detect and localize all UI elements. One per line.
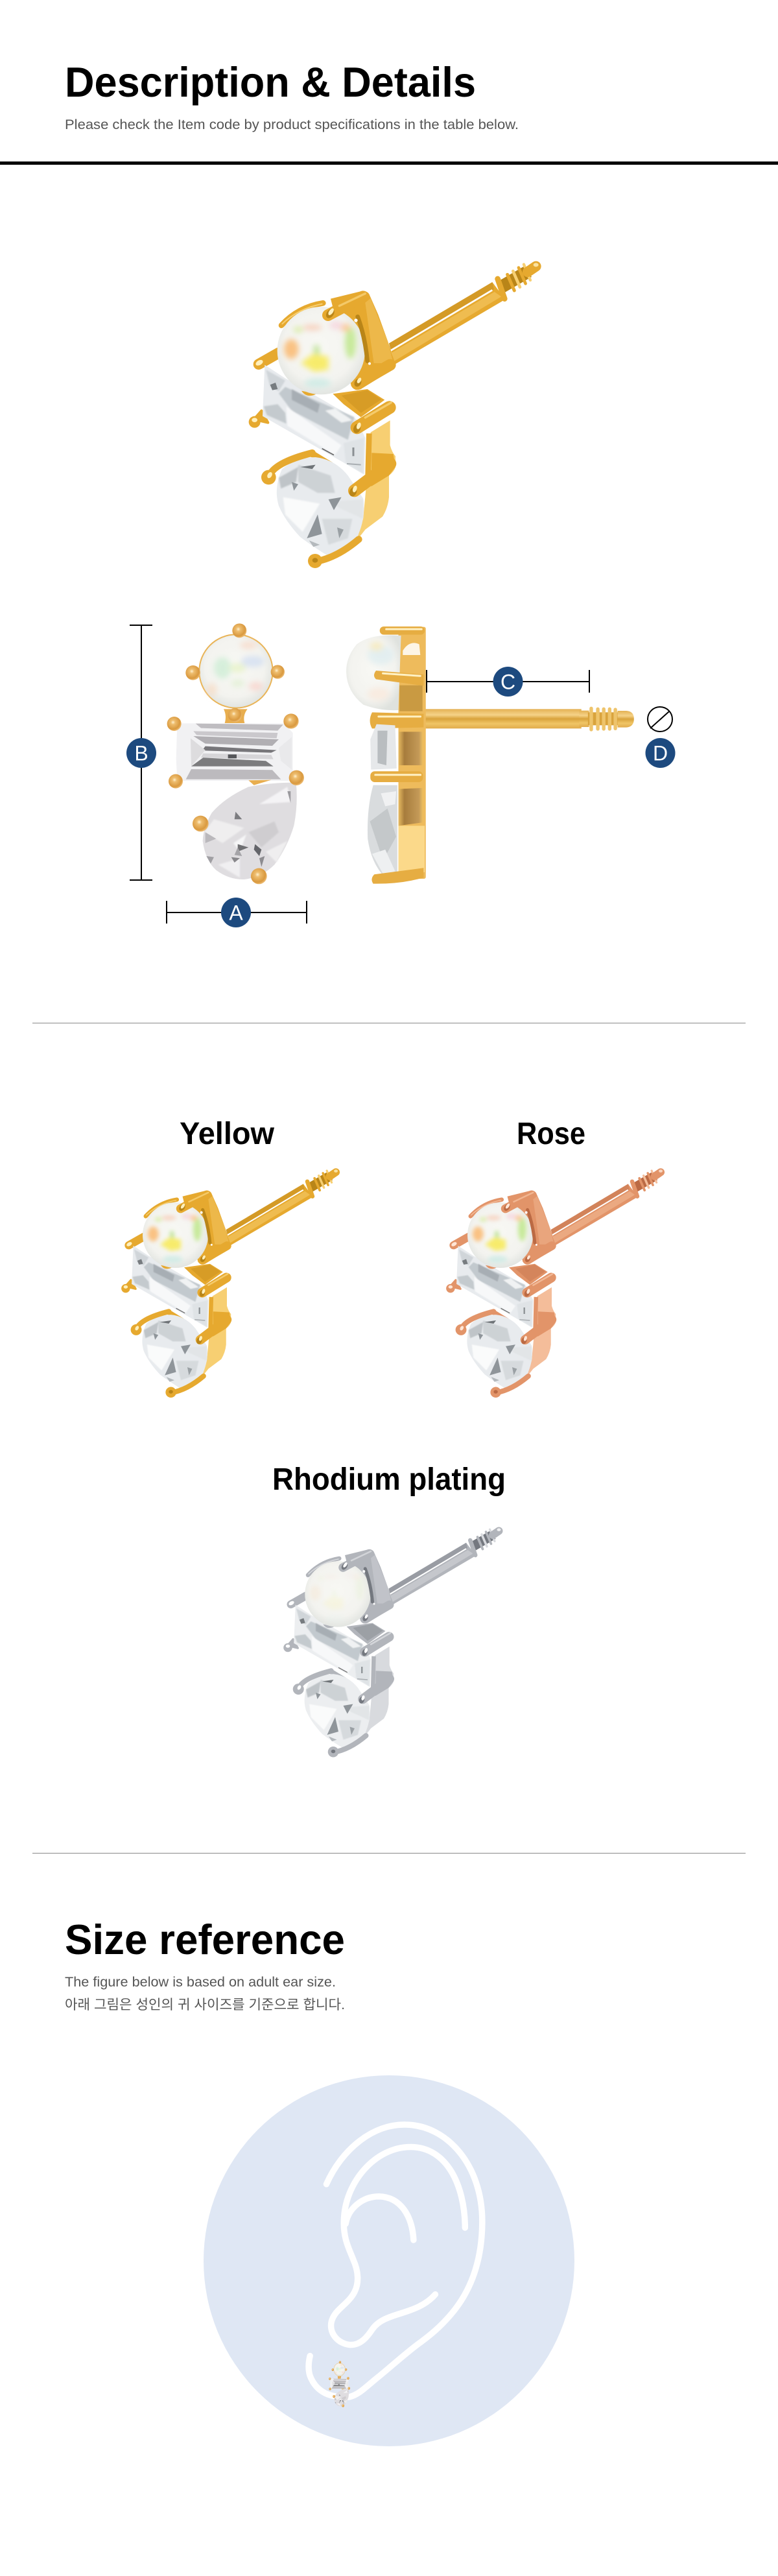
icon: large yellow gold earring, three-quarter view bbox=[249, 263, 539, 568]
dimension badge D bbox=[646, 738, 676, 768]
header rule bbox=[0, 161, 778, 165]
body text: size note in Korean: 아래 그림은 성인의 귀 사이즈를 기준으로 합니다. bbox=[65, 1998, 345, 2012]
dimension badge B: B bbox=[134, 742, 148, 765]
icon: rose earring bbox=[446, 1169, 663, 1398]
heading: Size reference: Size reference bbox=[65, 1916, 345, 1963]
dimension line C bbox=[427, 670, 589, 693]
icon: rhodium earring bbox=[283, 1528, 501, 1758]
diagram: earring side view with dimensions C and D bbox=[346, 626, 676, 884]
dimension line B bbox=[130, 625, 152, 880]
panel: yellow plating option bbox=[121, 1117, 338, 1398]
dimension badge A bbox=[221, 898, 251, 927]
heading: Yellow: Yellow bbox=[180, 1117, 275, 1151]
title: Description & Details: Description & Details bbox=[65, 58, 476, 106]
heading: Rhodium plating: Rhodium plating bbox=[272, 1462, 506, 1497]
body text: size note in English: The figure below is based on adult ear size. bbox=[65, 1975, 336, 1990]
dimension badge B bbox=[126, 738, 156, 768]
dimension badge C: C bbox=[501, 671, 515, 694]
dimension line A bbox=[167, 901, 307, 924]
icon: earring at scale on the lobe bbox=[329, 2361, 350, 2407]
icon: yellow earring bbox=[121, 1169, 338, 1398]
dimension badge C bbox=[493, 667, 523, 697]
icon: earring side view bbox=[346, 626, 634, 884]
diameter symbol bbox=[648, 707, 672, 732]
panel: rose plating option bbox=[446, 1117, 663, 1398]
background circle bbox=[204, 2075, 574, 2446]
panel: rhodium plating option bbox=[272, 1462, 506, 1758]
icon: ear outline bbox=[309, 2125, 482, 2397]
diagram: earring front view with dimensions A and B bbox=[126, 623, 307, 927]
dimension badge A: A bbox=[229, 901, 243, 925]
icon: earring front view bbox=[167, 623, 304, 884]
dimension badge D: D bbox=[653, 742, 668, 765]
panel: ear size illustration bbox=[204, 2075, 574, 2446]
heading: Rose: Rose bbox=[517, 1117, 585, 1151]
subtitle text: Please check the Item code by product specifications in the table below. bbox=[65, 117, 519, 132]
